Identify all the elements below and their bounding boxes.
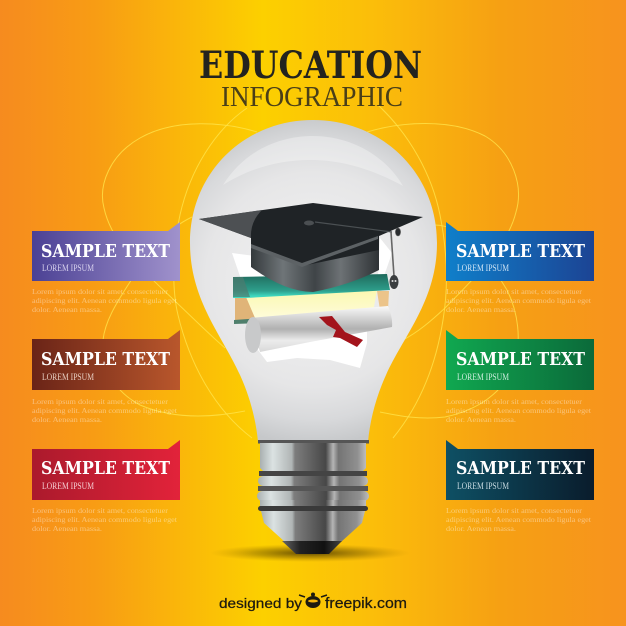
banner: purple: SAMPLE TEXT xyxy=(41,241,171,262)
text block: green: adipiscing elit. Aenean commodo ligula eget xyxy=(446,406,592,415)
banner: dark teal: SAMPLE TEXT xyxy=(456,458,586,479)
banner: dark teal: LOREM IPSUM xyxy=(457,482,509,492)
text block: purple xyxy=(32,287,178,314)
heading: education: EDUCATION xyxy=(199,43,422,87)
banner: green: LOREM IPSUM xyxy=(457,373,509,383)
title xyxy=(199,43,422,113)
screw base xyxy=(257,440,369,554)
text block: brown: dolor. Aenean massa. xyxy=(32,415,102,424)
text block: brown: adipiscing elit. Aenean commodo ligula eget xyxy=(32,406,178,415)
books xyxy=(233,274,390,325)
text block: dark teal: adipiscing elit. Aenean commodo ligula eget xyxy=(446,515,592,524)
banner: purple xyxy=(32,222,180,281)
cap band xyxy=(251,237,379,292)
cap mortarboard xyxy=(199,203,423,266)
banner: blue: SAMPLE TEXT xyxy=(456,241,586,262)
banner: red xyxy=(32,440,180,500)
red ribbon xyxy=(319,316,363,347)
banner: red: LOREM IPSUM xyxy=(42,482,94,492)
banner: red: SAMPLE TEXT xyxy=(41,458,171,479)
banner: brown xyxy=(32,330,180,390)
text block: brown: Lorem ipsum dolor sit amet, consectetuer xyxy=(32,397,169,406)
text block: green: Lorem ipsum dolor sit amet, consectetuer xyxy=(446,397,583,406)
text block: purple: Lorem ipsum dolor sit amet, consectetuer xyxy=(32,287,169,296)
text block: red xyxy=(32,506,178,533)
heading: infographic: INFOGRAPHIC xyxy=(221,81,403,113)
text block: brown xyxy=(32,397,178,424)
book cover upper xyxy=(233,274,390,298)
text block: blue xyxy=(446,287,592,314)
text block: green xyxy=(446,397,592,424)
text block: blue: dolor. Aenean massa. xyxy=(446,305,516,314)
text block: dark teal: dolor. Aenean massa. xyxy=(446,524,516,533)
graduation cap xyxy=(199,203,423,292)
banner: blue xyxy=(446,222,594,281)
text block: red: Lorem ipsum dolor sit amet, consectetuer xyxy=(32,506,169,515)
banner: brown: LOREM IPSUM xyxy=(42,373,94,383)
banner: brown: SAMPLE TEXT xyxy=(41,349,171,370)
light bulb xyxy=(190,120,437,554)
footer credit: freepik.com xyxy=(325,596,407,612)
banner: purple: LOREM IPSUM xyxy=(42,264,94,274)
bulb highlight xyxy=(223,136,403,186)
book pages xyxy=(246,290,377,325)
diploma paper xyxy=(232,238,392,368)
contact tip xyxy=(282,541,342,554)
cap edge shine xyxy=(251,236,378,267)
text block: green: dolor. Aenean massa. xyxy=(446,415,516,424)
icon: ground shadow xyxy=(210,544,410,562)
text block: red: adipiscing elit. Aenean commodo ligula eget xyxy=(32,515,178,524)
tassel xyxy=(390,275,398,289)
banner: green: SAMPLE TEXT xyxy=(456,349,586,370)
banner: blue: LOREM IPSUM xyxy=(457,264,509,274)
book cover lower xyxy=(235,297,262,322)
text block: dark teal: Lorem ipsum dolor sit amet, consectetuer xyxy=(446,506,583,515)
cap left shine xyxy=(199,210,262,238)
banner: green xyxy=(446,330,594,390)
rolled diploma xyxy=(245,306,392,353)
icon: freepik bee xyxy=(299,592,327,608)
footer credit xyxy=(219,592,407,612)
text block: blue: adipiscing elit. Aenean commodo ligula eget xyxy=(446,296,592,305)
cap button and cord xyxy=(304,220,401,289)
orbit lines xyxy=(102,105,518,438)
banner: dark teal xyxy=(446,440,594,500)
text block: dark teal xyxy=(446,506,592,533)
text block: purple: adipiscing elit. Aenean commodo ligula eget xyxy=(32,296,178,305)
text block: red: dolor. Aenean massa. xyxy=(32,524,102,533)
bulb glass xyxy=(190,120,437,442)
text block: blue: Lorem ipsum dolor sit amet, consectetuer xyxy=(446,287,583,296)
text block: purple: dolor. Aenean massa. xyxy=(32,305,102,314)
footer credit: designed by xyxy=(219,595,302,611)
